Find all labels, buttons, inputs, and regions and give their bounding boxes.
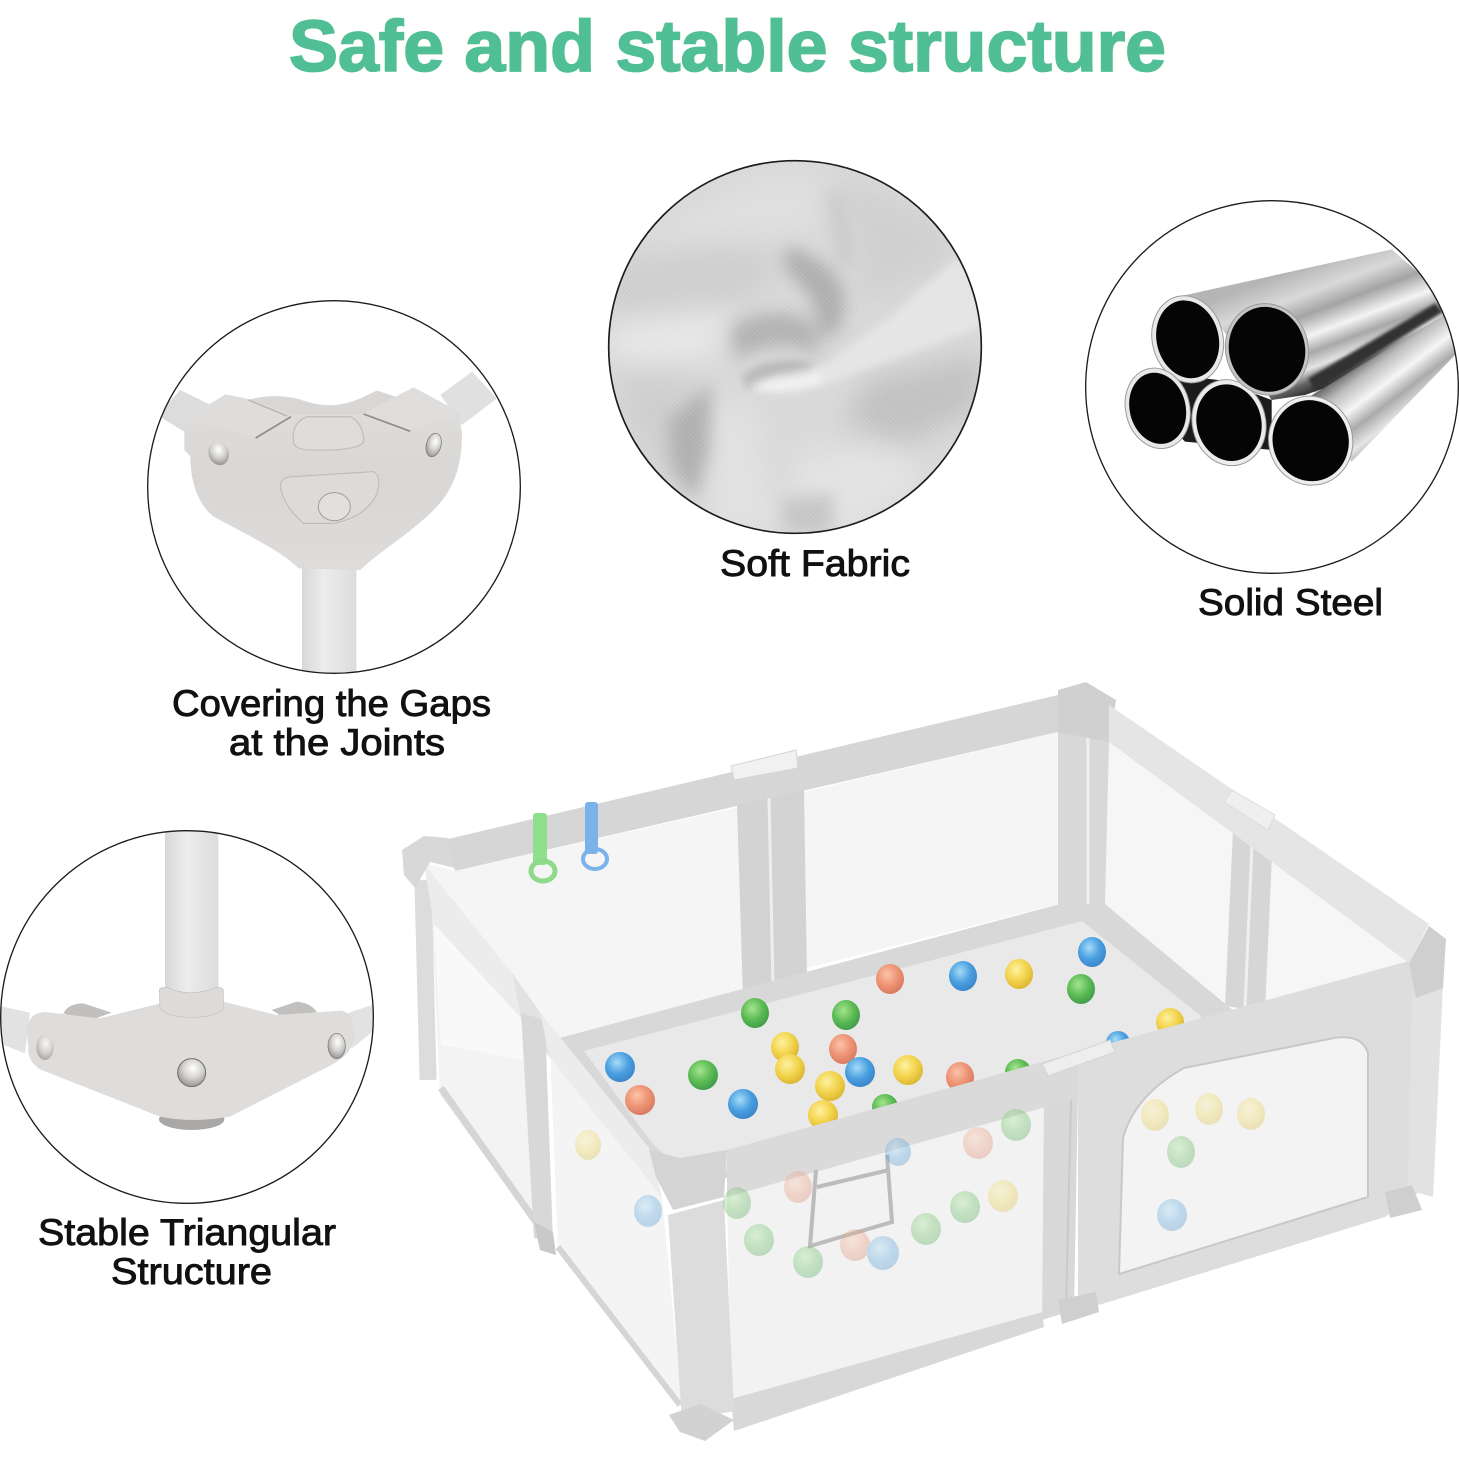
triangular base body — [27, 1002, 354, 1120]
label: solid steel: Solid Steel — [1198, 582, 1383, 623]
label: covering the gaps: Covering the Gaps — [172, 683, 491, 724]
playpen floor — [552, 904, 1240, 1185]
right rail clip — [1224, 790, 1275, 830]
front zipper door outline — [810, 1155, 892, 1246]
panel: soft fabric circle — [608, 160, 982, 534]
right corner cap — [1409, 926, 1446, 998]
back rail clip — [731, 750, 798, 780]
playpen front left panel — [649, 1052, 1078, 1431]
toy balls on floor — [605, 937, 1184, 1130]
playpen right side wall — [1105, 705, 1429, 1012]
label: stable triangular structure: Stable Triangular — [38, 1212, 336, 1253]
left foot — [534, 1222, 556, 1255]
right corner post — [1408, 985, 1443, 1197]
triangular base bolts — [36, 1033, 345, 1087]
panel: playpen — [402, 682, 1446, 1441]
door mesh — [1119, 1037, 1368, 1274]
pull ring: blue — [583, 802, 607, 869]
playpen left side wall — [414, 864, 682, 1405]
label: stable triangular structure — [38, 1212, 336, 1292]
front rail clip — [1042, 1040, 1115, 1076]
triangular base pipes and post — [0, 830, 375, 1130]
steel tube bodies — [1158, 249, 1459, 462]
panel: covering the gaps joint circle — [148, 301, 520, 677]
panel: solid steel circle — [1086, 201, 1459, 573]
joint pipes — [157, 372, 497, 677]
centre foot — [1058, 1292, 1099, 1324]
joint bolts — [205, 432, 444, 521]
triangular base collar — [159, 987, 223, 1017]
joint top plates — [209, 388, 447, 524]
playpen front right panel — [1078, 961, 1443, 1310]
front-right foot — [1385, 1185, 1422, 1218]
panel: stable triangular structure circle — [0, 830, 375, 1203]
title: Safe and stable structure — [289, 7, 1166, 87]
pull ring: green — [531, 813, 555, 881]
label: stable triangular structure: Structure — [111, 1251, 272, 1292]
playpen back wall — [420, 682, 1116, 1045]
joint body — [184, 387, 462, 570]
front corner foot — [669, 1404, 734, 1441]
label: covering the gaps: at the Joints — [229, 722, 445, 763]
back-left corner cap — [402, 836, 455, 888]
steel tube ends — [1124, 295, 1354, 486]
label: covering the gaps — [172, 683, 491, 763]
balls seen through mesh — [575, 1093, 1265, 1278]
label: soft fabric: Soft Fabric — [720, 543, 910, 584]
